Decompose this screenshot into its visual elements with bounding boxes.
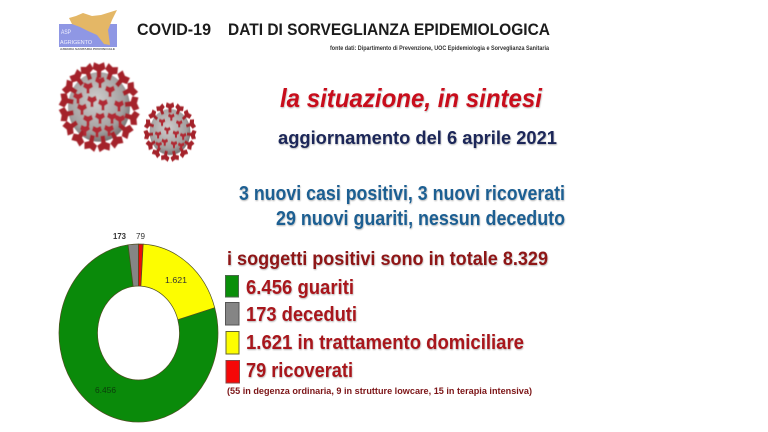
legend text: deceduti: 173 deceduti [246, 304, 357, 326]
legend text: trattamento domiciliare: 1.621 in trattamento domiciliare [246, 332, 524, 354]
chart label: 79: 79 [136, 231, 145, 241]
legend swatch: trattamento domiciliare [226, 332, 239, 354]
logo: ASP text: ASP [61, 30, 71, 36]
icon: large coronavirus [58, 62, 140, 152]
segment: ricoverati [138, 244, 143, 286]
legend text: guariti: 6.456 guariti [246, 277, 354, 299]
legend swatch: deceduti [226, 302, 239, 325]
update date: aggiornamento del 6 aprile 2021 [278, 128, 557, 148]
chart label: 6.456: 6.456 [95, 385, 116, 395]
source note: fonte dati: Dipartimento di Prevenzione, UOC Epidemiologia e Sorveglianza Sanitaria [330, 46, 550, 52]
segment: trattamento domiciliare [141, 244, 215, 320]
logo: Agrigento text: AGRIGENTO [60, 40, 93, 46]
chart label: 1.621: 1.621 [165, 275, 187, 285]
summary line 1: 3 nuovi casi positivi, 3 nuovi ricoverati [239, 183, 565, 205]
legend text: ricoverati: 79 ricoverati [246, 360, 353, 382]
logo: Sicily map [69, 10, 117, 45]
logo: caption: AZIENDA SANITARIA PROVINCIALE [60, 47, 115, 51]
summary line 2: 29 nuovi guariti, nessun deceduto [276, 208, 565, 230]
icon: small coronavirus [143, 102, 197, 162]
legend [226, 276, 524, 383]
total positive subjects: i soggetti positivi sono in totale 8.329 [227, 249, 548, 270]
chart label: 173: 173 [113, 231, 126, 241]
legend swatch: ricoverati [226, 360, 240, 383]
segment: guariti [59, 245, 218, 422]
title: dati di sorveglianza epidemiologica: DATI DI SORVEGLIANZA EPIDEMIOLOGICA [228, 20, 550, 39]
title: COVID-19: COVID-19 [137, 20, 211, 39]
donut chart [59, 244, 218, 422]
heading: la situazione, in sintesi: la situazione, in sintesi [280, 83, 543, 113]
segment: deceduti [128, 244, 138, 286]
hospitalisation breakdown note: (55 in degenza ordinaria, 9 in strutture lowcare, 15 in terapia intensiva) [227, 386, 532, 397]
logo: ASP Agrigento [59, 10, 117, 51]
legend swatch: guariti [226, 276, 238, 297]
